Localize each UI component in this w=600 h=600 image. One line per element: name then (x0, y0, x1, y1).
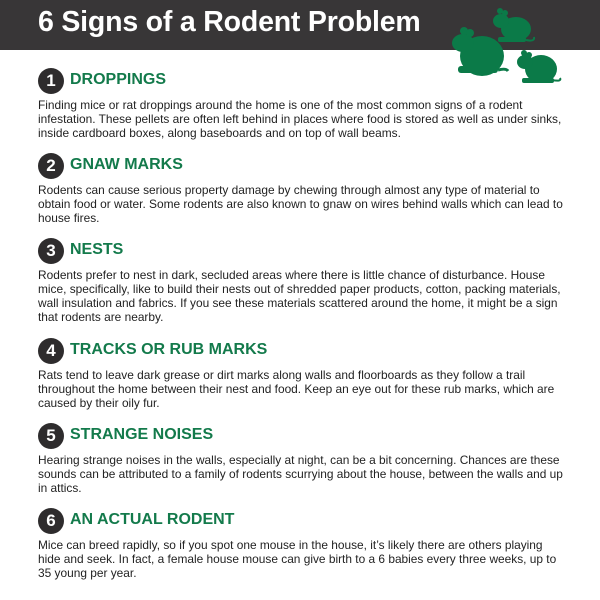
body 4: Rats tend to leave dark grease or dirt marks along walls and floorboards as they follow a trail (38, 368, 525, 382)
icon: rodents (452, 8, 562, 83)
heading 6: 6 (46, 511, 56, 530)
heading 4 (38, 338, 267, 364)
heading 2: GNAW MARKS (70, 156, 183, 173)
body 4 (38, 368, 554, 410)
body 6: Mice can breed rapidly, so if you spot one mouse in the house, it’s likely there are others playing (38, 538, 543, 552)
heading 1 (38, 68, 166, 94)
body 2: obtain food or water. Some rodents are also known to gnaw on wires behind walls which can lead to (38, 197, 563, 211)
heading 3: 3 (46, 241, 56, 260)
body 6: hide and seek. In fact, a female house mouse can give birth to a 6 babies every three weeks, up to (38, 552, 556, 566)
section 5 (38, 423, 563, 495)
body 1 (38, 98, 561, 140)
body 3: wall insulation and fabrics. If you see these materials scattered around the home, it might be a sign (38, 296, 558, 310)
heading 6: AN ACTUAL RODENT (70, 511, 234, 528)
section 3 (38, 238, 561, 324)
heading 5: STRANGE NOISES (70, 426, 213, 443)
body 5: in attics. (38, 481, 82, 495)
heading 2: 2 (46, 156, 56, 175)
heading 2 (38, 153, 183, 179)
heading 1: DROPPINGS (70, 71, 166, 88)
body 1: Finding mice or rat droppings around the home is one of the most common signs of a rodent (38, 98, 522, 112)
body 1: inside cardboard boxes, along baseboards and on top of wall beams. (38, 126, 401, 140)
title: 6 Signs of a Rodent Problem (38, 6, 421, 38)
body 6: 35 young per year. (38, 566, 136, 580)
heading 1: 1 (46, 71, 56, 90)
body 5 (38, 453, 563, 495)
heading 3 (38, 238, 123, 264)
body 6 (38, 538, 556, 580)
section 2 (38, 153, 563, 225)
body 1: infestation. These pellets are often left behind in places where food is stored as well as under sinks, (38, 112, 561, 126)
body 2: house fires. (38, 211, 99, 225)
body 3 (38, 268, 561, 324)
body 3: that rodents are nearby. (38, 310, 163, 324)
section 4 (38, 338, 554, 410)
heading 4: 4 (46, 341, 56, 360)
section 1 (38, 68, 561, 140)
heading 3: NESTS (70, 241, 123, 258)
body 3: Rodents prefer to nest in dark, secluded areas where there is little chance of disturbance. House (38, 268, 545, 282)
heading 5 (38, 423, 213, 449)
body 4: throughout the home between their nest and food. Keep an eye out for these rub marks, which are (38, 382, 554, 396)
body 4: caused by their oily fur. (38, 396, 160, 410)
body 2 (38, 183, 563, 225)
body 2: Rodents can cause serious property damage by chewing through almost any type of material to (38, 183, 540, 197)
body 5: Hearing strange noises in the walls, especially at night, can be a bit concerning. Chances are these (38, 453, 560, 467)
header band (0, 0, 600, 50)
heading 6 (38, 508, 234, 534)
heading 4: TRACKS OR RUB MARKS (70, 341, 267, 358)
heading 5: 5 (46, 426, 56, 445)
section 6 (38, 508, 556, 580)
body 5: sounds can be attributed to a family of rodents scurrying about the house, between the walls and up (38, 467, 563, 481)
body 3: mice, specifically, like to build their nests out of shredded paper products, cotton, packing materials, (38, 282, 561, 296)
